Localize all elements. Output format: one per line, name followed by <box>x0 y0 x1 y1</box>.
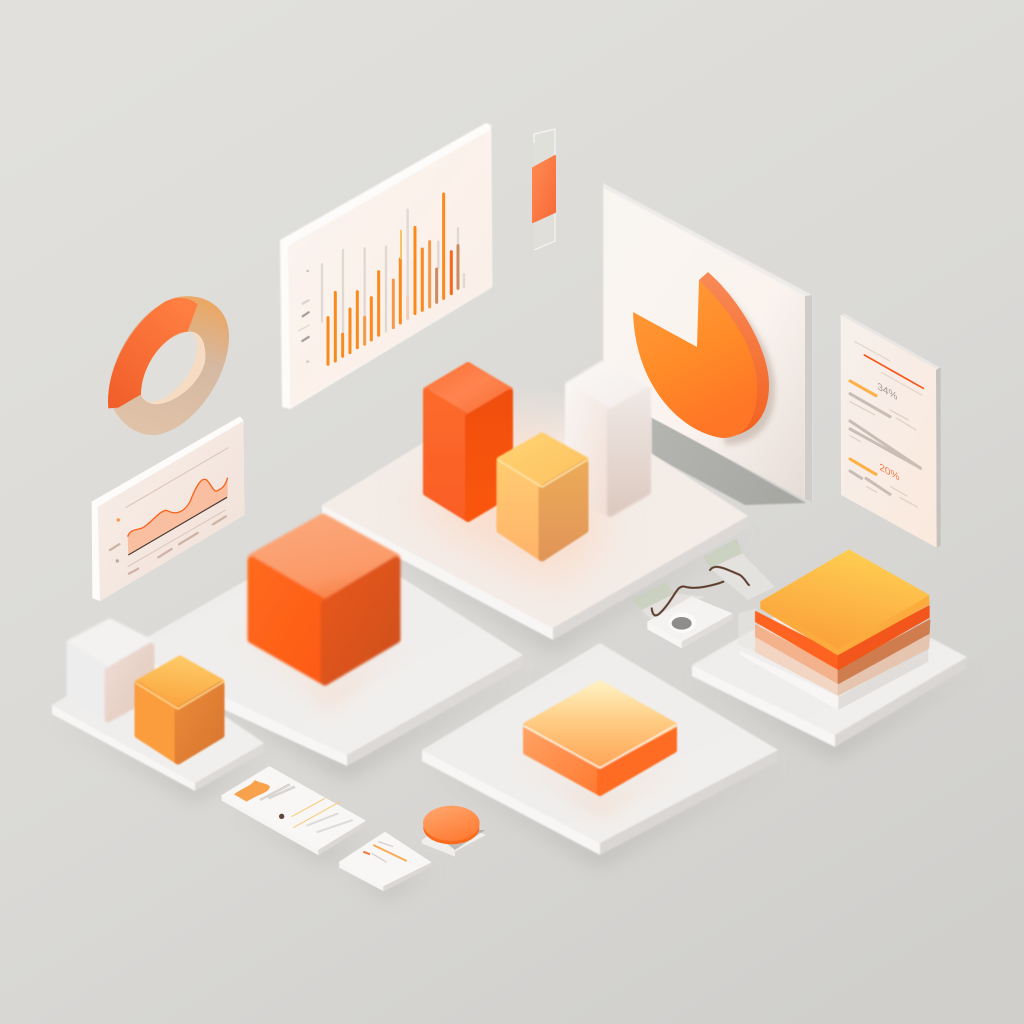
figure: 20%: 20% <box>879 461 900 484</box>
figure: 34%: 34% <box>877 381 898 403</box>
inner wall <box>141 332 205 404</box>
peach layer <box>756 638 838 695</box>
cube: small orange <box>136 659 223 761</box>
layered stack <box>738 550 930 710</box>
bars <box>298 194 464 364</box>
line <box>128 478 228 537</box>
button top <box>423 806 480 841</box>
wire <box>652 567 749 615</box>
panel: bar chart <box>280 123 492 409</box>
pie side <box>699 272 769 438</box>
pie face <box>633 280 757 438</box>
glow under slab <box>510 750 690 815</box>
panel: line chart <box>92 416 244 601</box>
panel: pie chart <box>603 183 812 502</box>
platform: right <box>692 585 967 747</box>
red rule <box>864 355 923 388</box>
small floating tag <box>533 129 555 250</box>
cube: large orange <box>252 518 396 681</box>
orange tag <box>533 156 555 222</box>
platform: top <box>322 376 748 640</box>
cube: tall orange <box>426 365 510 519</box>
orange segment <box>108 298 198 408</box>
panel: document <box>841 314 941 548</box>
donut chart <box>108 296 229 435</box>
axis labels <box>298 271 309 362</box>
cube: yellow <box>498 436 587 558</box>
platform: small left <box>52 655 264 791</box>
pie shadow <box>712 280 775 445</box>
hole <box>142 332 197 402</box>
small report card <box>222 767 365 855</box>
card blob <box>234 780 270 802</box>
glow on top platform <box>410 420 610 585</box>
glass panes <box>632 538 742 610</box>
top layer <box>761 550 928 648</box>
cube: tall white <box>568 364 648 514</box>
small note card <box>339 832 431 891</box>
red layer <box>756 612 838 669</box>
slab: center <box>524 683 676 793</box>
cube: small white <box>70 622 151 719</box>
stack base <box>740 648 928 710</box>
top layer edge <box>761 595 929 655</box>
button <box>422 806 486 857</box>
platform: large left <box>125 532 523 766</box>
area <box>128 478 228 555</box>
pie panel floor shadow <box>652 416 806 505</box>
floor shadows <box>50 515 975 897</box>
tan layer <box>756 625 838 683</box>
platform: center <box>422 643 778 855</box>
glow on large platform <box>230 625 410 710</box>
glasses and lens object <box>632 538 775 648</box>
